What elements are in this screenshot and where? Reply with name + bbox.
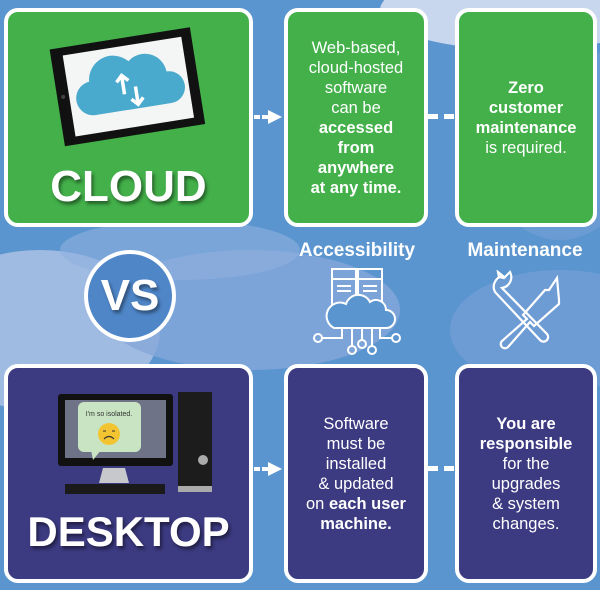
panel: maintenance desktop <box>455 364 597 583</box>
panel: maintenance cloud: is required. <box>485 138 567 156</box>
panel: accessibility desktop: must be <box>327 434 385 452</box>
icon: desktop computer: I'm so isolated. <box>86 411 132 418</box>
label: Accessibility: Accessibility <box>299 240 415 261</box>
panel: accessibility desktop: Software <box>323 414 389 432</box>
panel: maintenance desktop: upgrades <box>492 474 560 492</box>
panel: accessibility desktop: on each user <box>306 494 406 512</box>
panel: accessibility cloud: cloud-hosted <box>309 58 403 76</box>
panel: accessibility desktop <box>284 364 428 583</box>
connector: bottom boxes <box>428 466 454 471</box>
panel: maintenance cloud: Zero <box>508 78 544 96</box>
panel: accessibility cloud: accessed <box>319 118 393 136</box>
panel: accessibility cloud: Web-based, <box>312 38 400 56</box>
arrow: cloud to accessibility <box>254 110 282 124</box>
panel: maintenance desktop: & system <box>492 494 560 512</box>
panel: accessibility cloud: from <box>338 138 374 156</box>
panel: accessibility cloud: software <box>325 78 387 96</box>
icon: servers cloud network <box>313 268 401 355</box>
panel: maintenance desktop: You are <box>496 414 556 432</box>
icon: tablet with cloud <box>50 27 206 146</box>
panel: accessibility cloud: can be <box>331 98 381 116</box>
panel: maintenance desktop: changes. <box>493 514 559 532</box>
panel: accessibility cloud: anywhere <box>318 158 394 176</box>
panel: maintenance cloud <box>455 8 597 227</box>
arrow: desktop to software <box>254 462 282 476</box>
heading: CLOUD: CLOUD <box>50 162 207 211</box>
panel: maintenance cloud: maintenance <box>476 118 576 136</box>
label: Maintenance: Maintenance <box>467 240 583 261</box>
heading: DESKTOP: DESKTOP <box>27 508 230 555</box>
connector: accessibility to maintenance <box>428 114 454 119</box>
panel: maintenance cloud: customer <box>489 98 563 116</box>
panel: accessibility desktop: & updated <box>318 474 394 492</box>
panel: accessibility cloud: at any time. <box>311 178 401 196</box>
panel: accessibility desktop: installed <box>326 454 386 472</box>
badge: VS <box>84 250 176 342</box>
icon: wrench and screwdriver <box>492 270 560 350</box>
panel: desktop <box>4 364 253 583</box>
panel: accessibility cloud <box>284 8 428 227</box>
panel: accessibility desktop: machine. <box>320 514 392 532</box>
panel: maintenance desktop: responsible <box>480 434 572 452</box>
icon: desktop computer <box>58 392 212 494</box>
badge: VS: VS <box>101 271 159 320</box>
panel: cloud <box>4 8 253 227</box>
panel: maintenance desktop: for the <box>503 454 549 472</box>
